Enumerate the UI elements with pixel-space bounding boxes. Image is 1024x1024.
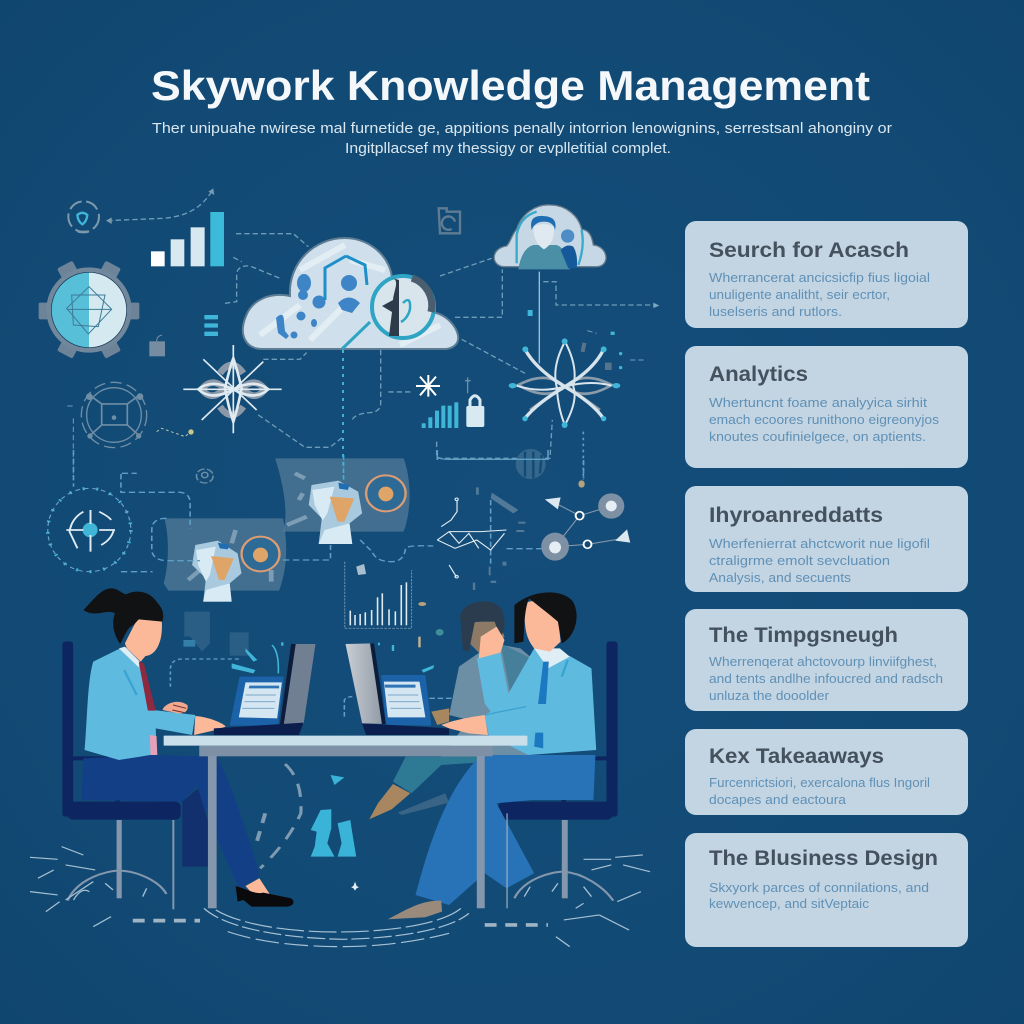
icon: small folder [439, 208, 460, 233]
panel: search: Wherrancerat ancicsicfip fius ligoial [709, 270, 930, 285]
panel: timpgsneugh: The Timpgsneugh [709, 624, 898, 647]
left woman [81, 588, 293, 907]
line chart frame with bars [345, 562, 412, 628]
icon: nodes and arrows [541, 493, 630, 561]
subtitle: Ther unipuahe nwirese mal furnetide ge, appitions penally intorrion lenowignins, serrestsanl ahonginy or [152, 120, 892, 137]
icon: decorative fragments right [473, 487, 525, 590]
panel: business design: Skxyork parces of connilations, and [709, 880, 929, 895]
laptop left [214, 644, 315, 735]
laptop right [346, 643, 449, 735]
table [164, 736, 527, 908]
connector lines left [67, 188, 343, 480]
cloud swashes [260, 245, 440, 345]
chess pieces [311, 775, 356, 857]
data link dotted vertical [342, 350, 344, 470]
cloud ring emblem [342, 276, 434, 349]
panel: search: unuligente analitht, seir ecrtor, [709, 287, 890, 302]
icon: molecular network [437, 498, 506, 578]
main cloud [243, 238, 458, 349]
connector lines middle [73, 450, 585, 572]
icon: list bars [204, 315, 218, 336]
panel: head card right [275, 458, 410, 544]
icon: network node [509, 338, 620, 428]
icon: signal star, bars and padlock [416, 375, 484, 428]
panel: third topic: Analysis, and secuents [709, 570, 852, 585]
panel: analytics: Whertuncnt foame analyyica sirhit [709, 395, 927, 410]
panel: search: luselseris and rutlors. [709, 304, 842, 319]
flying particles [232, 602, 464, 708]
faint background shapes [170, 612, 453, 717]
panel: timpgsneugh: and tents andlhe infoucred and radsch [709, 671, 943, 686]
title: Skywork Knowledge Management [151, 62, 870, 109]
subtitle: Ingitpllacsef my thessigy or evplletitial complet. [345, 140, 671, 157]
panel: analytics: knoutes coufinielgece, on aptients. [709, 429, 926, 444]
panel: business design: The Blusiness Design [709, 847, 938, 870]
subtitle [152, 120, 892, 157]
panel: business design: kewvencep, and sitVeptaic [709, 896, 870, 911]
icon: small ring [196, 469, 213, 483]
dashed arc under table [255, 764, 301, 868]
left chair [62, 641, 181, 909]
panel: analytics [685, 346, 968, 468]
middle diagram group [48, 450, 630, 628]
panel: key takeaways: docapes and eactoura [709, 792, 847, 807]
panel: third topic: ctraligrme emolt sevcluation [709, 553, 890, 568]
panel: key takeaways: Furcenrictsiori, exercalona flus Ingoril [709, 775, 930, 790]
panel: analytics: emach ecoores runithono eigreonyjos [709, 412, 940, 427]
panel: search [685, 221, 968, 328]
icon: network star [183, 345, 282, 433]
panel: key takeaways: Kex Takeaaways [709, 745, 884, 768]
panel: timpgsneugh: Wherrenqerat ahctovourp linviifghest, [709, 654, 937, 669]
floor rings and rays [30, 847, 650, 947]
icon: target circle [81, 382, 147, 448]
icon: gear [39, 261, 139, 359]
icon: circuit ring [48, 488, 131, 572]
panel: business design [685, 833, 968, 947]
panel: key takeaways [685, 729, 968, 815]
panel: analytics: Analytics [709, 363, 808, 386]
upper left diagram group [39, 188, 343, 480]
panel: head card left [164, 518, 286, 602]
cloud icons [276, 274, 360, 339]
icon: top cloud with person [494, 205, 606, 269]
scene: people at table [30, 588, 650, 947]
icon: faint globe [516, 449, 546, 479]
panel: timpgsneugh [685, 609, 968, 711]
panel: third topic: Ihyroanreddatts [709, 504, 883, 527]
icon: shield ring [68, 201, 99, 233]
right man [388, 592, 596, 919]
upper right diagram group [352, 205, 659, 480]
icon: small padlock [149, 335, 165, 356]
icon: bar chart [151, 212, 224, 266]
star particle [351, 882, 359, 891]
right chair [499, 641, 618, 901]
third person behind [369, 601, 534, 819]
panel: third topic [685, 486, 968, 592]
connector lines right [352, 258, 659, 480]
panel: third topic: Wherfenierrat ahctcworit nue ligofil [709, 536, 930, 551]
panel: timpgsneugh: unluza the dooolder [709, 688, 830, 703]
panel: search: Seurch for Acasch [709, 239, 909, 262]
